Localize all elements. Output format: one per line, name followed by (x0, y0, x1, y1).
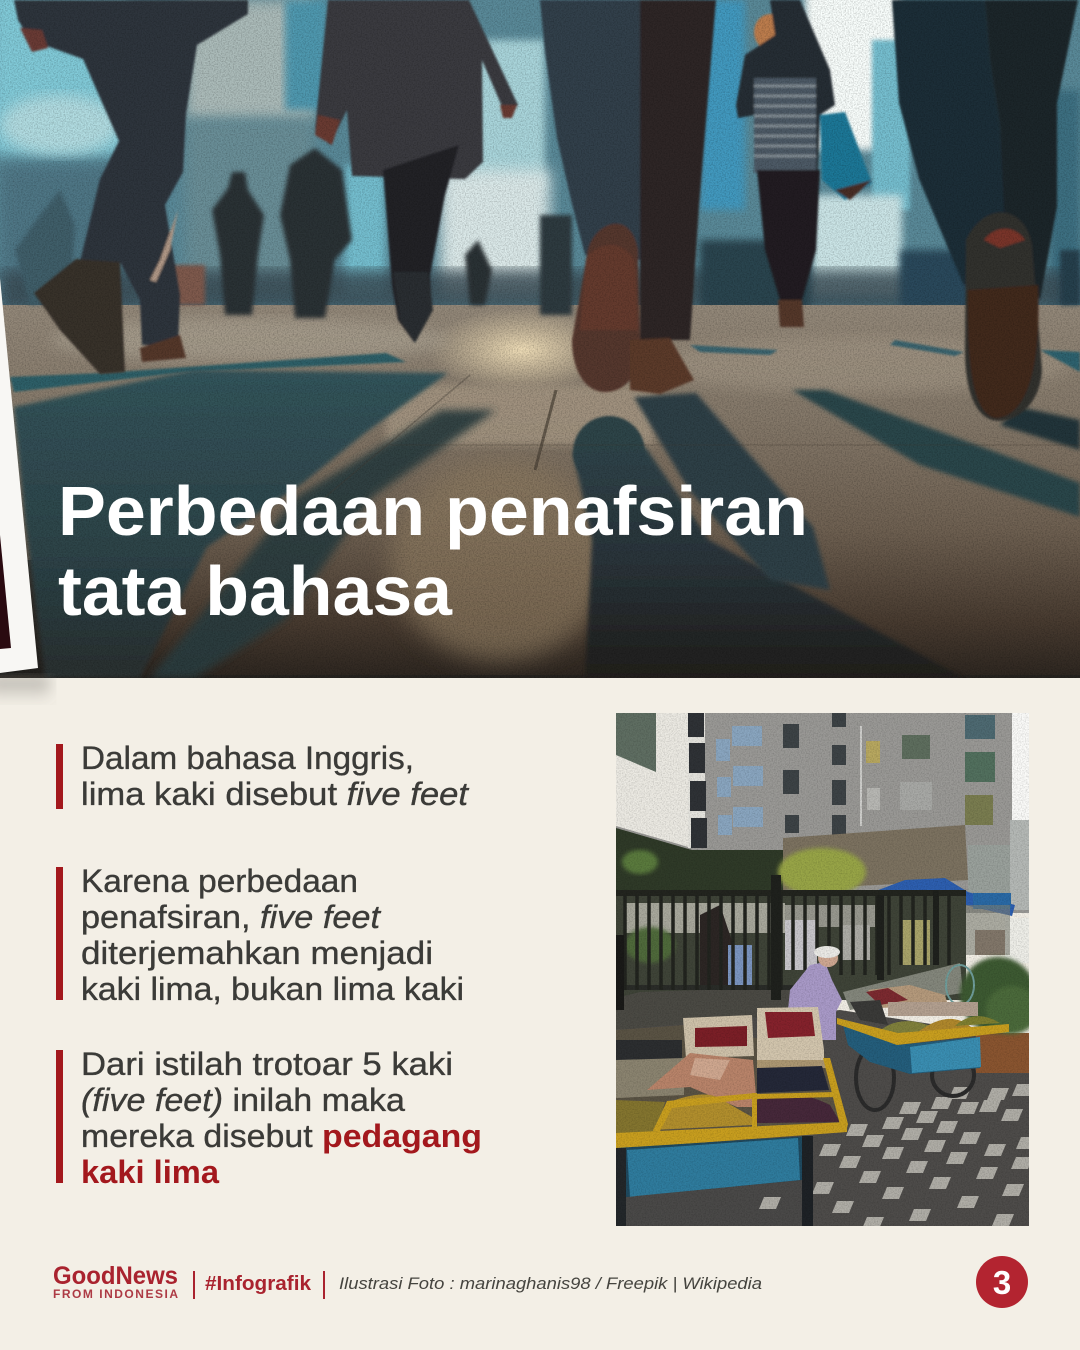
text block 3: mereka disebut pedagang (81, 1118, 482, 1154)
hero photo: pedestrians' legs walking on a city sidewalk (0, 0, 1080, 678)
text block 3: (five feet) inilah maka (81, 1082, 405, 1118)
text block 3: kaki lima (81, 1154, 219, 1190)
title: tata bahasa (58, 552, 453, 630)
footer separator (193, 1271, 195, 1299)
footer logo: GoodNews (53, 1262, 178, 1290)
text block 3 (56, 1046, 482, 1190)
photo credit: Ilustrasi Foto : marinaghanis98 / Freepik | Wikipedia (339, 1274, 762, 1293)
text block 2: penafsiran, five feet (81, 899, 381, 935)
walker 2: coat and legs (315, 0, 518, 343)
tilted polaroid card at left edge (0, 278, 38, 673)
photo: street vendor carts (616, 713, 1038, 1229)
walker 1: left legs and shoe (14, 0, 248, 374)
text block 1: Dalam bahasa Inggris, (81, 740, 414, 776)
vendor man (788, 946, 842, 1040)
footer separator (323, 1271, 325, 1299)
text block 2: kaki lima, bukan lima kaki (81, 971, 464, 1007)
page number badge (976, 1256, 1028, 1308)
iron fence and people (616, 875, 1029, 1030)
title (58, 472, 808, 630)
box with red fruit (683, 1015, 754, 1058)
hero grain texture (0, 0, 1080, 678)
text block 2 (56, 863, 464, 1007)
planter and shrubs (946, 957, 1038, 1073)
footer logo: FROM INDONESIA (53, 1287, 178, 1301)
walker 3: jeans and sole (540, 0, 716, 394)
ground (0, 305, 1080, 678)
pavement with tiles (616, 1010, 1038, 1229)
page number badge: 3 (993, 1264, 1011, 1301)
title: Perbedaan penafsiran (58, 472, 808, 550)
card shadow under hero (0, 676, 50, 702)
footer hashtag: #Infografik (205, 1273, 312, 1295)
text block 1 (56, 740, 469, 812)
blue awning (878, 878, 1015, 916)
footer logo (53, 1262, 178, 1301)
text block 3: Dari istilah trotoar 5 kaki (81, 1046, 453, 1082)
right cart (837, 985, 1009, 1110)
walker 4: woman with striped top and blue bag (736, 0, 872, 327)
walker 5: right legs and raised shoe (892, 0, 1078, 421)
photo grain texture (616, 713, 1029, 1226)
text block 1: lima kaki disebut five feet (81, 776, 469, 812)
left cart (616, 1007, 848, 1226)
blurred city background (0, 0, 1080, 320)
text block 2: Karena perbedaan (81, 863, 358, 899)
far crowd (15, 148, 1080, 318)
long shadows on the pavement (10, 340, 1080, 678)
second box with red fruit (757, 1007, 824, 1060)
apartment building background (616, 713, 1029, 913)
text block 2: diterjemahkan menjadi (81, 935, 433, 971)
